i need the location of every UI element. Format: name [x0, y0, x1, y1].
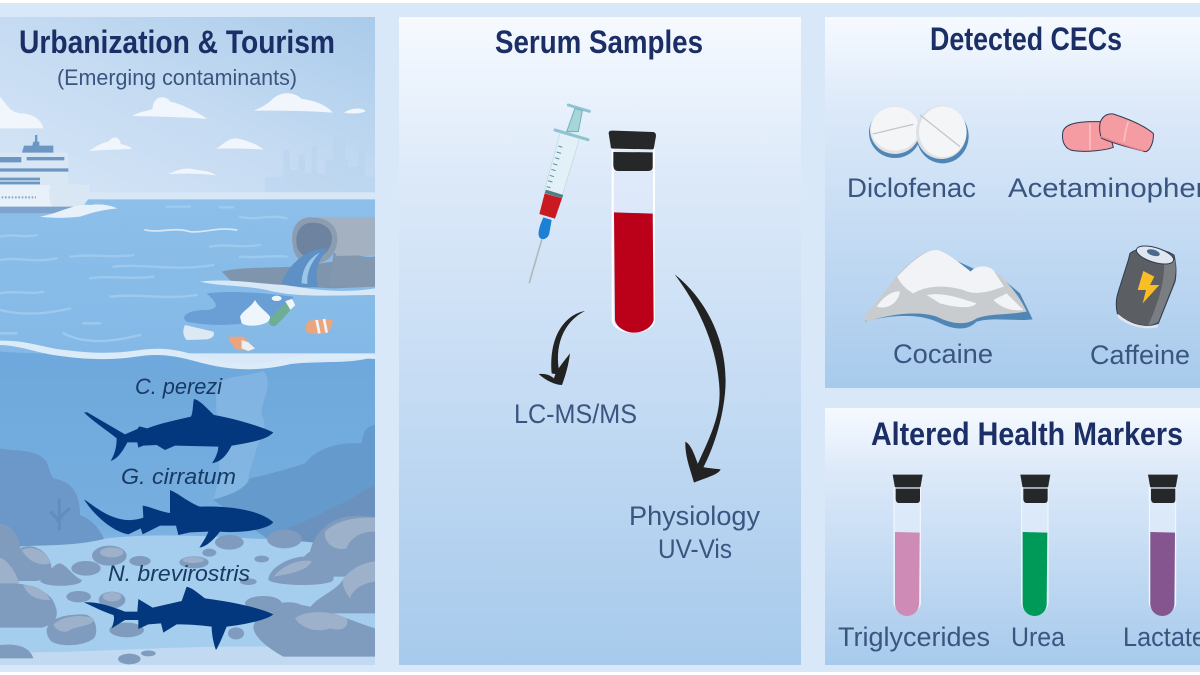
label: LC-MS/MS: LC-MS/MS	[514, 399, 637, 429]
city skyline	[265, 179, 290, 192]
sky	[0, 17, 375, 199]
panel: altered health markers	[825, 408, 1200, 665]
icon: cocaine powder pile	[864, 250, 1033, 329]
icon: pink tablets	[1062, 114, 1153, 152]
distant reef	[0, 448, 107, 547]
underwater lower scene (3x coordinates)	[0, 337, 375, 665]
icon: white pills	[869, 106, 969, 163]
icon: syringe	[529, 105, 589, 283]
arrow: to physiology	[675, 274, 726, 483]
tube: triglycerides	[893, 475, 923, 616]
floating bottle	[228, 337, 253, 351]
label: urea: Urea	[1011, 622, 1066, 652]
label: cocaine: Cocaine	[893, 339, 993, 369]
wave highlights	[0, 207, 287, 341]
heading: serum samples: Serum Samples	[495, 24, 703, 60]
heading: detected CECs: Detected CECs	[930, 21, 1122, 57]
sea	[0, 199, 375, 353]
panel: serum samples	[399, 17, 801, 665]
horizon	[122, 192, 375, 199]
arrow: to LC-MS/MS	[539, 311, 585, 385]
light column	[213, 371, 268, 500]
label: triglycerides: Triglycerides	[838, 622, 990, 652]
panel: detected CECs	[825, 17, 1200, 388]
label: C. perezi: C. perezi	[135, 374, 223, 399]
panel: urbanization and tourism	[0, 17, 375, 665]
label: UV-Vis: UV-Vis	[658, 534, 732, 564]
label: caffeine: Caffeine	[1090, 340, 1190, 370]
label: diclofenac: Diclofenac	[847, 173, 976, 203]
seabed	[0, 535, 344, 652]
subheading: emerging contaminants: (Emerging contaminants)	[57, 65, 297, 90]
shark: N. brevirostris	[84, 587, 273, 650]
rocks	[0, 516, 375, 664]
heading: urbanization and tourism: Urbanization & Tourism	[19, 24, 335, 60]
label: G. cirratum: G. cirratum	[121, 464, 236, 489]
icon: energy drink can	[1116, 242, 1176, 328]
tube: urea	[1020, 475, 1050, 616]
icon: blood tube	[609, 131, 656, 333]
floating plastic debris	[183, 292, 333, 340]
cruise ship	[0, 135, 117, 218]
shark: G. cirratum	[84, 490, 273, 548]
underwater gradient	[0, 352, 375, 540]
shark: C. perezi	[84, 399, 273, 463]
label: acetaminophen: Acetaminophen	[1008, 173, 1200, 203]
scene: clouds, skyline, ship, sea (drawn in 3x coordinates)	[0, 93, 375, 353]
water surface band	[0, 341, 375, 369]
clouds	[0, 93, 366, 175]
label: N. brevirostris: N. brevirostris	[108, 561, 250, 586]
rock highlights	[0, 518, 375, 632]
label: physiology: Physiology	[629, 501, 760, 531]
sewage pipe	[200, 217, 375, 296]
tube: lactate	[1148, 475, 1178, 616]
